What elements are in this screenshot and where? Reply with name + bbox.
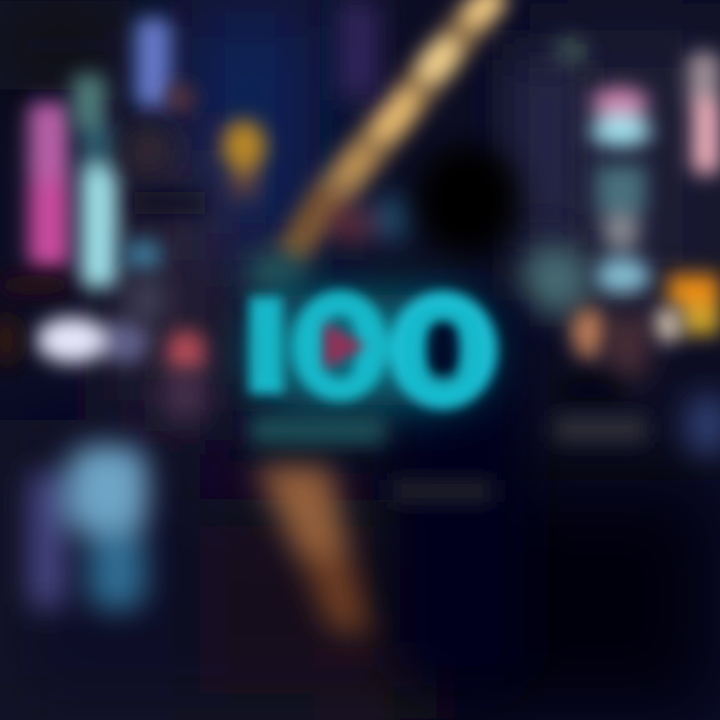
play icon <box>324 322 366 370</box>
dark shadow <box>555 381 625 399</box>
logo glow <box>250 295 490 405</box>
subtitle <box>250 416 385 444</box>
gold diagonal marquee <box>274 0 512 268</box>
caption <box>390 480 494 502</box>
mauve glow <box>163 369 207 421</box>
amber spot <box>167 84 195 112</box>
purple wall glow <box>515 60 575 230</box>
brown edge glow <box>0 314 20 366</box>
red light <box>166 330 206 374</box>
person body <box>395 290 525 690</box>
orange blob <box>571 307 607 359</box>
pink edge panel <box>688 52 720 174</box>
faint grey label <box>552 416 647 442</box>
dark awning <box>135 192 205 214</box>
person head <box>416 144 520 256</box>
yellow lamp <box>222 120 266 199</box>
blue sign <box>135 18 171 108</box>
grey wall glow <box>519 244 591 316</box>
right neon signs <box>515 37 720 457</box>
white light <box>36 317 149 364</box>
white store light <box>653 307 681 343</box>
cyan neon tower <box>72 74 118 288</box>
maroon glow <box>606 310 650 380</box>
colored glow above logo <box>245 196 410 290</box>
pink and cyan sign <box>590 87 652 147</box>
digit 1: 1 <box>246 276 286 421</box>
red glow beneath pink sign <box>0 275 75 295</box>
purple awning <box>340 0 378 100</box>
left neon signs <box>0 18 266 421</box>
digit 0: 0 <box>297 276 383 419</box>
orange storefront <box>668 274 720 335</box>
grey glow <box>127 278 163 322</box>
brown reflection <box>255 465 375 635</box>
blue reflection <box>30 445 148 610</box>
vertical sign column <box>593 165 651 295</box>
dark counter behind second digit <box>416 316 470 376</box>
pink neon sign <box>28 102 70 268</box>
logo 100 <box>246 276 489 424</box>
blue right glow <box>684 393 720 457</box>
street reflections <box>30 445 375 635</box>
digit 0: 0 <box>397 281 489 424</box>
blue side glow <box>123 239 163 271</box>
muted glow <box>124 126 172 174</box>
silhouette <box>395 144 525 690</box>
rooftop sign <box>552 37 588 67</box>
